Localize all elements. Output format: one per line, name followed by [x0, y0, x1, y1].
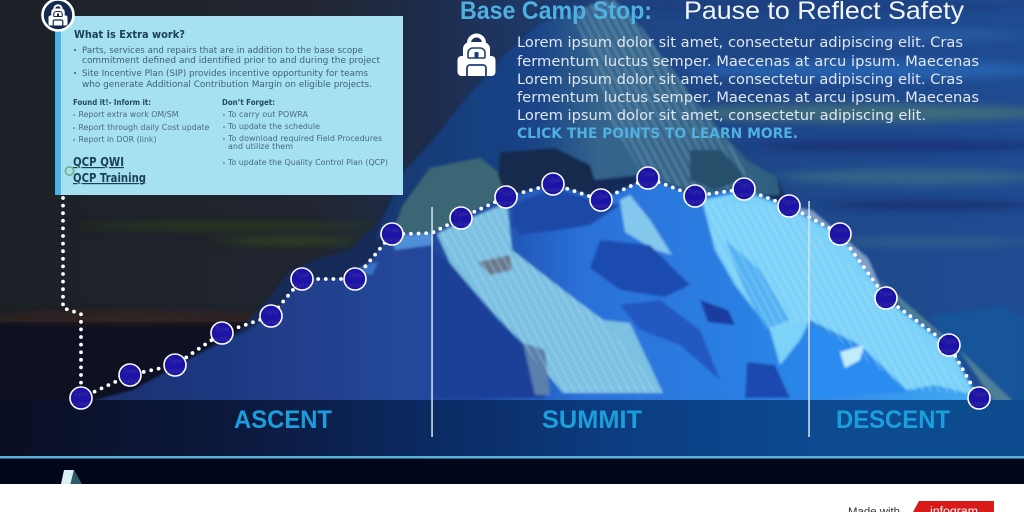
- node 13: Type: [641, 171, 655, 178]
- node 17: some: [832, 237, 848, 244]
- node 14: Type: [688, 189, 702, 196]
- node 16: [778, 195, 800, 217]
- bottom band behind section labels: [0, 400, 1024, 457]
- node 9: Type: [454, 211, 468, 218]
- don't forget list: To update the Quality Control Plan (QCP): [227, 158, 388, 167]
- node 2: Type: [123, 368, 137, 375]
- node 20: some: [971, 401, 987, 408]
- node 10: Type: [499, 190, 513, 197]
- section label: descent: DESCENT: [836, 406, 950, 434]
- link: QCP QWI: QCP QWI: [73, 155, 124, 169]
- node 6: some: [294, 282, 310, 289]
- node 2: some: [122, 378, 138, 385]
- don't forget list: To update the schedule: [227, 122, 320, 131]
- don't forget list: Don’t Forget:: [222, 98, 275, 107]
- node 10: some: [498, 200, 514, 207]
- node 4: [211, 322, 233, 344]
- node 15: Type: [737, 182, 751, 189]
- node 16: Type: [782, 199, 796, 206]
- body paragraph: Lorem ipsum dolor sit amet, consectetur adipiscing elit.: [517, 108, 926, 124]
- node 14: [684, 185, 706, 207]
- node 5: some: [263, 319, 279, 326]
- panel intro bullets: Parts, services and repairs that are in addition to the base scope: [82, 46, 363, 56]
- node 8: some: [384, 237, 400, 244]
- node 18: Type: [879, 291, 893, 298]
- node 13: [637, 167, 659, 189]
- node 12: Type: [594, 193, 608, 200]
- node 18: [875, 287, 897, 309]
- node 11: [542, 173, 564, 195]
- trail nodes: [70, 167, 990, 409]
- node 12: some: [593, 203, 609, 210]
- node 1: some: [73, 401, 89, 408]
- node 1: [70, 387, 92, 409]
- section dividers: [431, 201, 810, 437]
- node 8: [381, 223, 403, 245]
- don't forget list: and utilize them: [228, 142, 293, 151]
- node 11: Type: [546, 177, 560, 184]
- panel: what is extra work: [55, 16, 403, 195]
- green ring marker: [65, 167, 74, 175]
- node 18: some: [878, 301, 894, 308]
- node 6: Type: [295, 272, 309, 279]
- icon: backpack: [458, 36, 496, 76]
- title: [460, 0, 965, 25]
- don't forget list: To carry out POWRA: [227, 110, 309, 119]
- footer logo: [61, 470, 82, 484]
- section label: ascent: ASCENT: [234, 406, 332, 434]
- don't forget list: To download required Field Procedures: [227, 134, 382, 143]
- node 15: some: [736, 192, 752, 199]
- node 5: Type: [264, 309, 278, 316]
- body paragraph: fermentum luctus semper. Maecenas at arcu ipsum. Maecenas: [517, 54, 979, 70]
- node 15: [733, 178, 755, 200]
- node 3: [164, 354, 186, 376]
- body paragraph: fermentum luctus semper. Maecenas at arcu ipsum. Maecenas: [517, 90, 979, 106]
- node 3: Type: [168, 358, 182, 365]
- node 17: Type: [833, 227, 847, 234]
- node 4: some: [214, 336, 230, 343]
- body paragraph: Lorem ipsum dolor sit amet, consectetur adipiscing elit. Cras: [517, 72, 963, 88]
- dotted trail: [63, 178, 979, 398]
- footer bar: [0, 456, 1024, 512]
- node 9: some: [453, 221, 469, 228]
- panel heading: What is Extra work?: [74, 28, 185, 41]
- panel intro bullets: Site Incentive Plan (SIP) provides incentive opportunity for teams: [82, 69, 368, 79]
- don't forget list: [222, 98, 388, 167]
- node 14: some: [687, 199, 703, 206]
- node 19: some: [941, 348, 957, 355]
- body paragraph: [517, 35, 979, 142]
- node 7: [344, 268, 366, 290]
- node 7: some: [347, 282, 363, 289]
- node 2: [119, 364, 141, 386]
- call to action: CLICK THE POINTS TO LEARN MORE.: [517, 126, 798, 142]
- section label: summit: SUMMIT: [542, 406, 642, 434]
- node 4: Type: [215, 326, 229, 333]
- node 16: some: [781, 209, 797, 216]
- node 20: Type: [972, 391, 986, 398]
- node 19: [938, 334, 960, 356]
- found it list: Report in DOR (link): [78, 135, 157, 144]
- made with infogram badge: [848, 501, 994, 512]
- found it list: Report through daily Cost update: [78, 123, 210, 132]
- node 11: some: [545, 187, 561, 194]
- node 1: Type: [74, 391, 88, 398]
- panel intro bullets: who generate Additional Contribution Margin on eligible projects.: [82, 80, 372, 90]
- node 7: Type: [348, 272, 362, 279]
- found it list: Report extra work OM/SM: [78, 110, 178, 119]
- node 3: some: [167, 368, 183, 375]
- node 17: [829, 223, 851, 245]
- panel intro bullets: commitment defined and identified prior to and during the project: [82, 56, 380, 66]
- node 5: [260, 305, 282, 327]
- base camp badge icon: [42, 0, 74, 30]
- node 20: [968, 387, 990, 409]
- found it list: [73, 98, 210, 144]
- node 19: Type: [942, 338, 956, 345]
- panel intro bullets: [74, 46, 380, 90]
- link: QCP Training: QCP Training: [73, 171, 146, 185]
- node 6: [291, 268, 313, 290]
- found it list: Found it!- Inform it:: [73, 98, 151, 107]
- node 9: [450, 207, 472, 229]
- node 13: some: [640, 181, 656, 188]
- node 10: [495, 186, 517, 208]
- body paragraph: Lorem ipsum dolor sit amet, consectetur adipiscing elit. Cras: [517, 35, 963, 51]
- node 8: Type: [385, 227, 399, 234]
- node 12: [590, 189, 612, 211]
